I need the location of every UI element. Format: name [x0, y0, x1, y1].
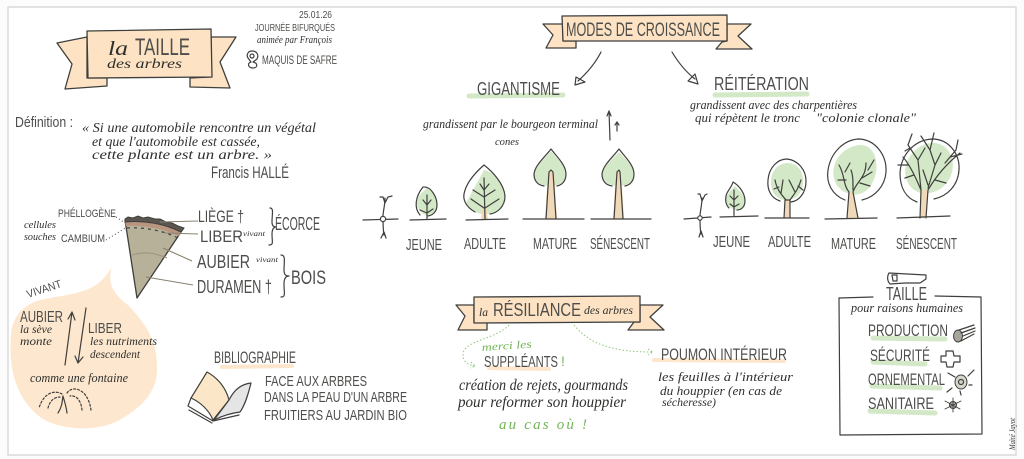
stage labels: JEUNE: [713, 234, 750, 251]
stage labels: [406, 234, 650, 254]
arrow to gigantisme: [575, 52, 601, 85]
bark and wood labels: souches: [24, 232, 56, 243]
stage labels: [713, 234, 957, 253]
arrow: nutrients descend: [75, 308, 86, 363]
stage labels: MATURE: [533, 236, 577, 253]
speech bubble: living tissue: descendent: [90, 347, 141, 361]
definition: et que l'automobile est cassée,: [92, 135, 260, 150]
event notes: JOURNÉE BIFURQUÉS: [255, 21, 335, 34]
tree: senescent: [591, 149, 651, 219]
dotted arrow to poumon interieur: [574, 325, 653, 355]
bibliography: BIBLIOGRAPHIE: [214, 348, 296, 367]
speech bubble: living tissue: monte: [20, 334, 53, 348]
event notes: [247, 10, 337, 68]
block: poumon interieur: [654, 345, 794, 409]
bark and wood labels: PHÉLLOGÈNE: [58, 207, 116, 220]
panel: pruning for human reasons: ORNEMENTAL: [868, 370, 945, 389]
tree: seedling: [684, 194, 711, 237]
section: gigantisme: cones: [495, 136, 519, 148]
icon: log: [954, 325, 975, 342]
trunk section wedge: [125, 216, 184, 298]
block: suppleants: merci les: [481, 339, 532, 354]
tree: young: [720, 182, 758, 217]
tree: seedling: [363, 196, 398, 238]
bark and wood labels: [24, 207, 326, 297]
tree: mature: [523, 149, 584, 219]
speech bubble: living tissue: VIVANT: [25, 278, 63, 301]
block: poumon interieur: les feuilles à l'intérieur: [658, 369, 794, 384]
bark and wood labels: DURAMEN †: [197, 277, 272, 297]
bark and wood labels: LIBER: [200, 227, 243, 246]
resilience banner: des arbres: [584, 303, 633, 317]
section: reiteration: qui répètent le tronc: [695, 110, 800, 125]
tree: adult: [464, 165, 508, 220]
bark and wood labels: CAMBIUM: [61, 233, 105, 245]
definition: « Si une automobile rencontre un végétal: [82, 121, 316, 136]
definition: Francis HALLÉ: [211, 163, 289, 182]
icon: cross: [941, 351, 960, 367]
tree: adult: [765, 159, 809, 218]
block: poumon interieur: du houppier (en cas de: [660, 383, 782, 398]
bark and wood labels: cellules: [24, 220, 56, 231]
panel: pruning for human reasons: SANITAIRE: [868, 394, 934, 413]
event notes: animée par François: [257, 35, 332, 46]
stage labels: SÉNESCENT: [590, 234, 650, 253]
section: reiteration: "colonie clonale": [816, 110, 917, 125]
title banner: [57, 29, 236, 89]
section: reiteration: [684, 74, 962, 253]
block: suppleants: pour reformer son houppier: [457, 394, 627, 411]
bibliography: DANS LA PEAU D'UN ARBRE: [264, 389, 407, 406]
icon: open book: [188, 372, 251, 423]
panel: pruning for human reasons: SÉCURITÉ: [870, 346, 930, 365]
panel: pruning for human reasons: pour raisons humaines: [850, 300, 963, 315]
definition: Définition :: [15, 114, 73, 131]
tree: young: [410, 187, 446, 220]
icon: location pin: [247, 51, 258, 68]
title banner: des arbres: [107, 57, 183, 72]
panel: pruning for human reasons: [839, 273, 982, 435]
block: suppleants: [457, 339, 628, 433]
stage labels: MATURE: [831, 236, 876, 253]
tree: senescent: [897, 133, 962, 218]
bark and wood labels: vivant: [256, 256, 279, 264]
title banner: la: [108, 38, 128, 60]
block: suppleants: au cas où !: [499, 417, 587, 433]
bark and wood labels: AUBIER: [197, 252, 250, 272]
bibliography: FACE AUX ARBRES: [265, 373, 367, 390]
growth modes banner: MODES DE CROISSANCE: [566, 20, 720, 41]
section: gigantisme: GIGANTISME: [477, 79, 560, 99]
bark and wood labels: vivant: [243, 230, 266, 238]
arrow to reiteration: [672, 52, 698, 84]
panel: pruning for human reasons: TAILLE: [886, 284, 927, 304]
stage labels: SÉNESCENT: [896, 234, 957, 253]
dotted arrow to suppleants: [463, 325, 509, 368]
tree: mature: [825, 139, 886, 219]
block: poumon interieur: sécheresse): [662, 395, 716, 409]
stage labels: ADULTE: [464, 236, 506, 253]
section: reiteration: grandissent avec des charpentières: [690, 97, 857, 112]
block: poumon interieur: POUMON INTÉRIEUR: [661, 345, 787, 364]
panel: pruning for human reasons: PRODUCTION: [868, 321, 948, 340]
definition: cette plante est un arbre. »: [92, 148, 272, 163]
bark and wood labels: ÉCORCE: [275, 214, 320, 234]
icon: saw: [888, 273, 926, 284]
icon: bug: [945, 398, 961, 412]
section: reiteration: RÉITÉRATION: [714, 74, 809, 94]
block: suppleants: création de rejets, gourmands: [459, 377, 628, 394]
icon: fountain: [39, 389, 91, 413]
resilience banner: la: [479, 305, 488, 319]
definition: [15, 114, 316, 182]
block: suppleants: SUPPLÉANTS: [484, 352, 558, 371]
bibliography: FRUITIERS AU JARDIN BIO: [264, 407, 407, 424]
resilience banner: RÉSILIANCE: [493, 300, 581, 320]
speech bubble: living tissue: comme une fontaine: [30, 370, 128, 385]
section: gigantisme: [363, 79, 651, 254]
speech bubble: living tissue: les nutriments: [90, 334, 157, 348]
bibliography: [188, 348, 407, 424]
stage labels: ADULTE: [768, 234, 811, 251]
event notes: MAQUIS DE SAFRE: [262, 53, 337, 67]
title banner: TAILLE: [135, 34, 190, 61]
arrows: upward growth: [607, 111, 619, 140]
speech bubble: living tissue: [11, 267, 157, 428]
arrow: sap rises: [65, 312, 75, 365]
speech bubble: living tissue: LIBER: [88, 320, 122, 337]
signature: Maïté Jayot: [1008, 417, 1017, 451]
bark and wood labels: BOIS: [291, 268, 326, 289]
event notes: 25.01.26: [299, 10, 332, 21]
section: gigantisme: grandissent par le bourgeon terminal: [423, 116, 598, 131]
block: suppleants: !: [561, 353, 565, 369]
resilience banner: [456, 296, 664, 330]
stage labels: JEUNE: [406, 237, 442, 254]
speech bubble: living tissue: la sève: [20, 322, 53, 336]
bark and wood labels: LIÈGE †: [198, 207, 244, 226]
speech bubble: living tissue: AUBIER: [20, 309, 63, 326]
growth modes banner: [543, 15, 752, 49]
icon: eye: [947, 370, 974, 395]
